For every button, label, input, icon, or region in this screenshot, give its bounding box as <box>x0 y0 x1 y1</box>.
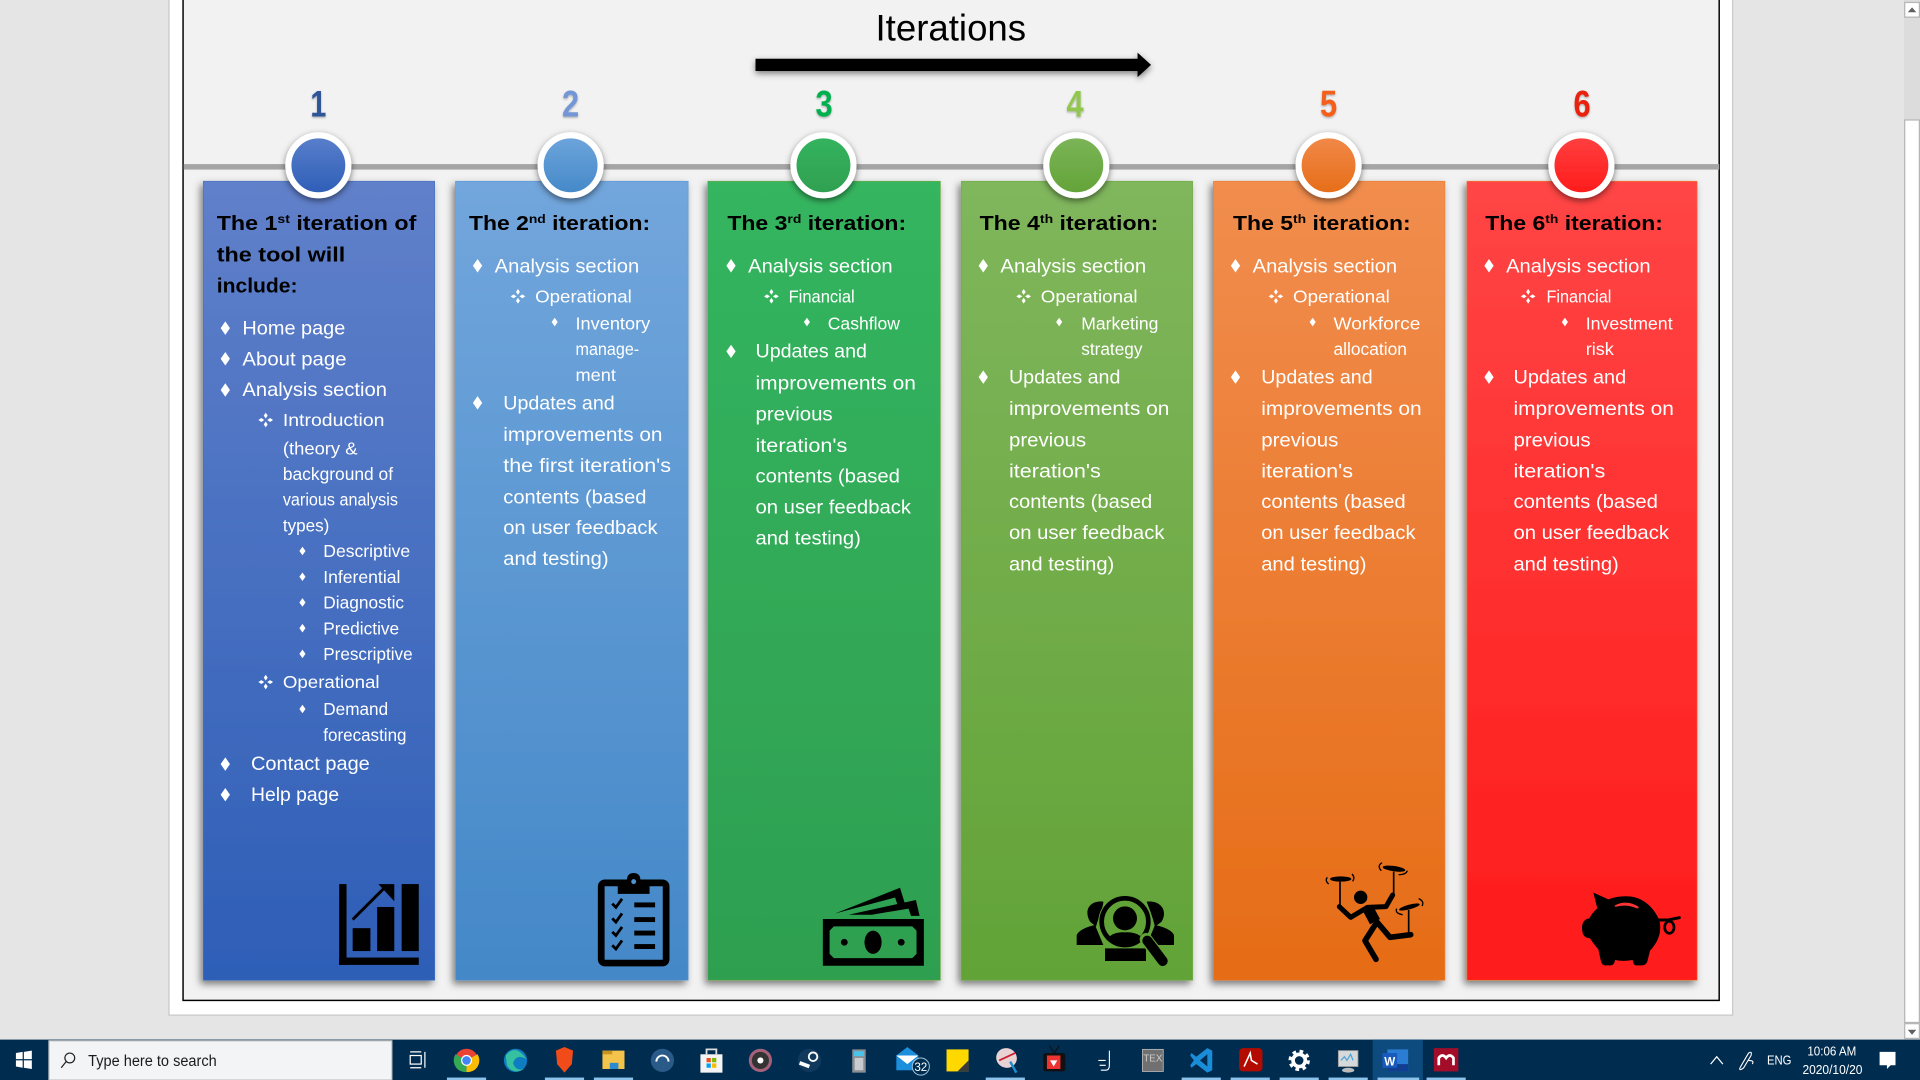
heading 3: The 3 <box>727 213 780 235</box>
icon: magnifier over people <box>1077 895 1174 961</box>
search box <box>49 1041 392 1080</box>
icon: editor lines <box>1098 1051 1109 1070</box>
search box: Type here to search <box>88 1053 217 1070</box>
card background 1 <box>203 181 435 980</box>
heading 4: th <box>1040 212 1053 226</box>
list 3 <box>726 255 916 549</box>
list 2: on user feedback <box>503 517 658 539</box>
list 6: iteration's <box>1513 461 1606 483</box>
list 4: strategy <box>1081 339 1143 359</box>
document page <box>169 0 1733 1015</box>
list 1: Contact page <box>251 753 370 775</box>
list 2: improvements on <box>503 424 662 446</box>
icon: headset app <box>651 1049 674 1072</box>
list 3: iteration's <box>756 435 848 457</box>
scrollbar <box>1904 0 1920 1041</box>
list 3: and testing) <box>756 527 861 549</box>
list 5 <box>1231 255 1422 576</box>
panel 2: second iteration <box>456 181 688 980</box>
list 6: Financial <box>1547 286 1611 306</box>
icon: bar chart <box>339 884 419 965</box>
icon: texmaker <box>1142 1049 1163 1071</box>
card background 6 <box>1467 181 1697 980</box>
list 4: on user feedback <box>1009 522 1165 544</box>
list 2 <box>473 255 671 570</box>
title: Iterations: Iterations <box>876 7 1026 48</box>
list 4: contents (based <box>1009 491 1152 513</box>
list 1: various analysis <box>283 490 398 510</box>
heading 1 <box>217 212 417 298</box>
icon: plate-spinning juggler <box>1326 863 1423 959</box>
list 4: previous <box>1009 429 1086 451</box>
list 5: Workforce <box>1333 313 1421 333</box>
heading 5: iteration: <box>1306 213 1411 235</box>
list 2: the first iteration's <box>503 455 671 477</box>
icon: banknotes <box>823 888 924 966</box>
list 3: contents (based <box>756 465 900 487</box>
icon: store <box>700 1049 722 1073</box>
list 1: Operational <box>283 672 380 692</box>
list 5: on user feedback <box>1261 522 1416 544</box>
list 6: on user feedback <box>1513 522 1669 544</box>
timeline nodes <box>288 135 1611 195</box>
heading 1: st <box>277 212 290 226</box>
iteration numbers <box>310 83 1591 124</box>
icon: media player <box>749 1049 772 1072</box>
list 3: Financial <box>789 286 855 306</box>
icon: piggy bank <box>1582 893 1679 965</box>
card background 2 <box>456 181 688 980</box>
list 1: Predictive <box>323 618 399 638</box>
list 3: Analysis section <box>748 255 893 277</box>
list 3: previous <box>756 404 833 426</box>
system tray <box>1711 1044 1896 1077</box>
list 6: previous <box>1513 429 1591 451</box>
list 3: Updates and <box>756 341 867 363</box>
list 1: Introduction <box>283 410 384 430</box>
icon: vscode <box>1190 1048 1212 1073</box>
list 2: ment <box>576 365 616 385</box>
heading 6: iteration: <box>1558 213 1663 235</box>
list 2: manage- <box>576 339 639 359</box>
list 6: and testing) <box>1513 554 1619 576</box>
timeline line <box>184 164 1719 170</box>
list 2: Operational <box>535 286 632 306</box>
card background 5 <box>1213 181 1445 980</box>
list 3: on user feedback <box>756 497 911 519</box>
iteration numbers: 6 <box>1573 83 1591 124</box>
framed diagram background <box>183 0 1719 1000</box>
heading 3: rd <box>787 212 801 226</box>
icon: sticky notes <box>947 1049 969 1071</box>
heading 1: include: <box>217 276 298 298</box>
running-app indicators <box>447 1078 1466 1080</box>
heading 2: nd <box>529 212 546 226</box>
list 2: contents (based <box>503 486 647 508</box>
system tray: ENG <box>1767 1053 1791 1068</box>
list 5: allocation <box>1333 339 1407 359</box>
list 6: Investment <box>1586 313 1673 333</box>
icon: start button <box>16 1051 32 1069</box>
list 4: Updates and <box>1009 366 1120 388</box>
list 1: Diagnostic <box>323 593 404 613</box>
heading 6: th <box>1545 212 1558 226</box>
windows taskbar <box>0 1040 1920 1080</box>
list 5: and testing) <box>1261 554 1367 576</box>
icon: word: W <box>1384 1055 1395 1068</box>
heading 1: The 1 <box>217 213 269 235</box>
panel 5: fifth iteration <box>1213 181 1445 980</box>
panel 4: fourth iteration <box>961 181 1193 980</box>
list 1 <box>221 317 413 806</box>
heading 6: The 6 <box>1485 213 1538 235</box>
list 5: Updates and <box>1261 366 1373 388</box>
heading 2: The 2 <box>469 213 522 235</box>
list 6: contents (based <box>1513 491 1658 513</box>
list 1: Inferential <box>323 567 400 587</box>
iteration numbers: 1 <box>310 83 326 124</box>
list 4: and testing) <box>1009 554 1114 576</box>
heading 5: th <box>1293 212 1306 226</box>
list 4 <box>979 255 1169 576</box>
icon: edge <box>504 1049 527 1072</box>
list 1: types) <box>283 515 329 535</box>
iteration numbers: 3 <box>816 83 833 124</box>
list 2: Inventory <box>576 313 650 333</box>
iteration numbers: 2 <box>562 83 579 124</box>
panel 6: sixth iteration <box>1467 181 1697 980</box>
list 1: forecasting <box>323 725 407 745</box>
list 1: Prescriptive <box>323 644 413 664</box>
list 4: Operational <box>1041 286 1138 306</box>
icon: snipping tool <box>993 1045 1020 1073</box>
icon: mail with badge <box>896 1047 929 1075</box>
icon: steam <box>798 1049 821 1072</box>
list 1: Analysis section <box>242 379 387 401</box>
icon: file explorer <box>602 1051 624 1069</box>
list 1: (theory & <box>283 438 358 458</box>
icon: task view <box>410 1052 425 1068</box>
iteration numbers: 5 <box>1320 83 1337 124</box>
card background 3 <box>708 181 940 980</box>
list 6: risk <box>1586 339 1614 359</box>
heading 5: The 5 <box>1233 213 1286 235</box>
list 1: Demand <box>323 699 388 719</box>
arrow: iteration direction <box>756 53 1151 77</box>
list 5: Analysis section <box>1253 255 1397 277</box>
icon: clipboard checklist <box>601 873 666 963</box>
list 3: improvements on <box>756 372 916 394</box>
heading 1: the tool will <box>217 244 345 266</box>
icon: tv downloader <box>1043 1046 1065 1071</box>
list 5: improvements on <box>1261 398 1422 420</box>
icon: mail with badge: 32 <box>914 1061 927 1074</box>
list 6: Updates and <box>1513 366 1626 388</box>
list 2: Updates and <box>503 393 615 415</box>
list 2: Analysis section <box>495 255 639 277</box>
list 5: iteration's <box>1261 461 1353 483</box>
list 6: improvements on <box>1513 398 1674 420</box>
iteration numbers: 4 <box>1067 83 1084 124</box>
list 5: contents (based <box>1261 491 1406 513</box>
list 3: Cashflow <box>828 313 900 333</box>
icon: calculator <box>852 1049 866 1073</box>
list 1: Help page <box>251 784 339 806</box>
heading 4: The 4 <box>980 213 1032 235</box>
icon: brave <box>556 1047 573 1073</box>
active word background <box>1373 1040 1423 1080</box>
heading 2: iteration: <box>546 213 650 235</box>
panel 3: third iteration <box>708 181 940 980</box>
heading 1: iteration of <box>290 213 417 235</box>
list 4: Marketing <box>1081 313 1158 333</box>
list 5: previous <box>1261 429 1339 451</box>
list 5: Operational <box>1293 286 1390 306</box>
list 6: Analysis section <box>1506 255 1651 277</box>
list 4: Analysis section <box>1000 255 1146 277</box>
icon: word <box>1382 1049 1408 1071</box>
heading 3: iteration: <box>801 213 906 235</box>
icon: mendeley <box>1434 1048 1458 1071</box>
icon: chrome <box>454 1049 479 1072</box>
system tray: 10:06 AM <box>1807 1044 1856 1059</box>
list 2: and testing) <box>503 548 609 570</box>
list 1: About page <box>242 349 347 371</box>
heading 4: iteration: <box>1053 213 1158 235</box>
system tray: 2020/10/20 <box>1802 1062 1862 1077</box>
list 6 <box>1484 255 1674 576</box>
list 4: improvements on <box>1009 398 1169 420</box>
icon: resource monitor <box>1338 1051 1358 1073</box>
icon: settings gear <box>1290 1051 1308 1070</box>
list 4: iteration's <box>1009 461 1101 483</box>
card background 4 <box>961 181 1193 980</box>
list 1: background of <box>283 464 393 484</box>
list 1: Descriptive <box>323 541 410 561</box>
icon: acrobat <box>1239 1048 1262 1071</box>
icon: texmaker: TEX <box>1143 1054 1163 1065</box>
list 1: Home page <box>242 317 345 339</box>
panel 1: first iteration <box>203 181 435 980</box>
